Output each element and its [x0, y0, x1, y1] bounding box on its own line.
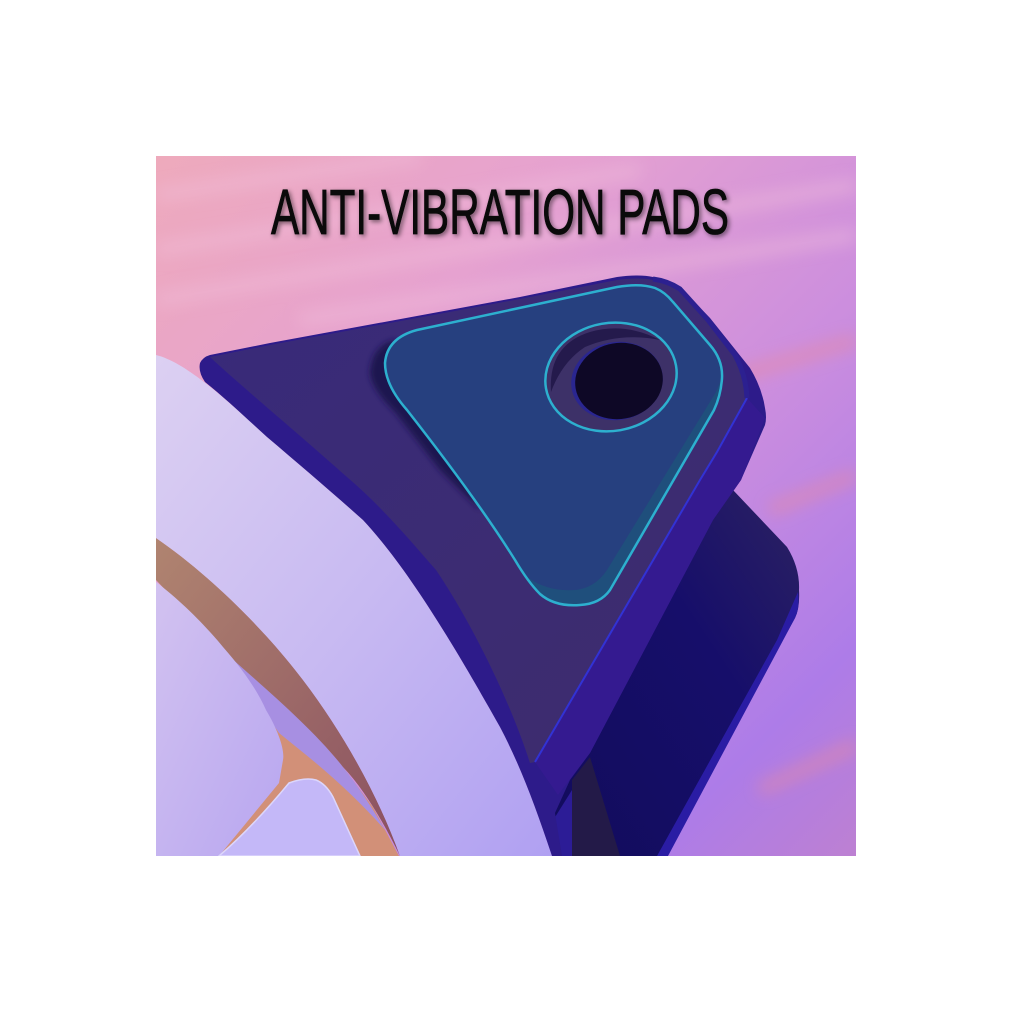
title: ANTI-VIBRATION PADS: [273, 178, 731, 250]
pad recess shadow: [370, 340, 480, 510]
bright blue edge line: [535, 398, 747, 762]
title: [271, 176, 731, 250]
bracket side band: [200, 276, 766, 856]
lavender shadow band beside copper: [235, 662, 385, 830]
second fan blade: [219, 779, 360, 856]
pad outline: [385, 285, 722, 605]
lower foot of bracket: [552, 490, 799, 856]
anti-vibration pad: [385, 285, 722, 605]
title: ANTI-VIBRATION PADS: [271, 176, 729, 248]
translucent fan blade: [156, 582, 283, 856]
photo panel: [156, 156, 856, 856]
copper inner ring: [156, 538, 400, 856]
orange wood under the ring: [222, 728, 399, 856]
small blue clip piece: [556, 790, 572, 856]
mounting hole rim: [571, 342, 663, 420]
rubber grommet: [544, 321, 678, 433]
dark bracket: [200, 276, 766, 856]
foot lower clip: [572, 757, 620, 856]
white fan ring: [156, 355, 552, 856]
foot blue lower edge: [657, 592, 799, 856]
bracket top face: [210, 278, 747, 763]
pad lower tint: [527, 378, 722, 605]
wood surface background: [156, 156, 856, 856]
bracket side strip: [586, 476, 743, 758]
mounting hole: [575, 342, 663, 420]
grommet shadow: [551, 328, 660, 392]
infographic scene: [156, 156, 856, 856]
bracket top rim: [653, 279, 747, 398]
